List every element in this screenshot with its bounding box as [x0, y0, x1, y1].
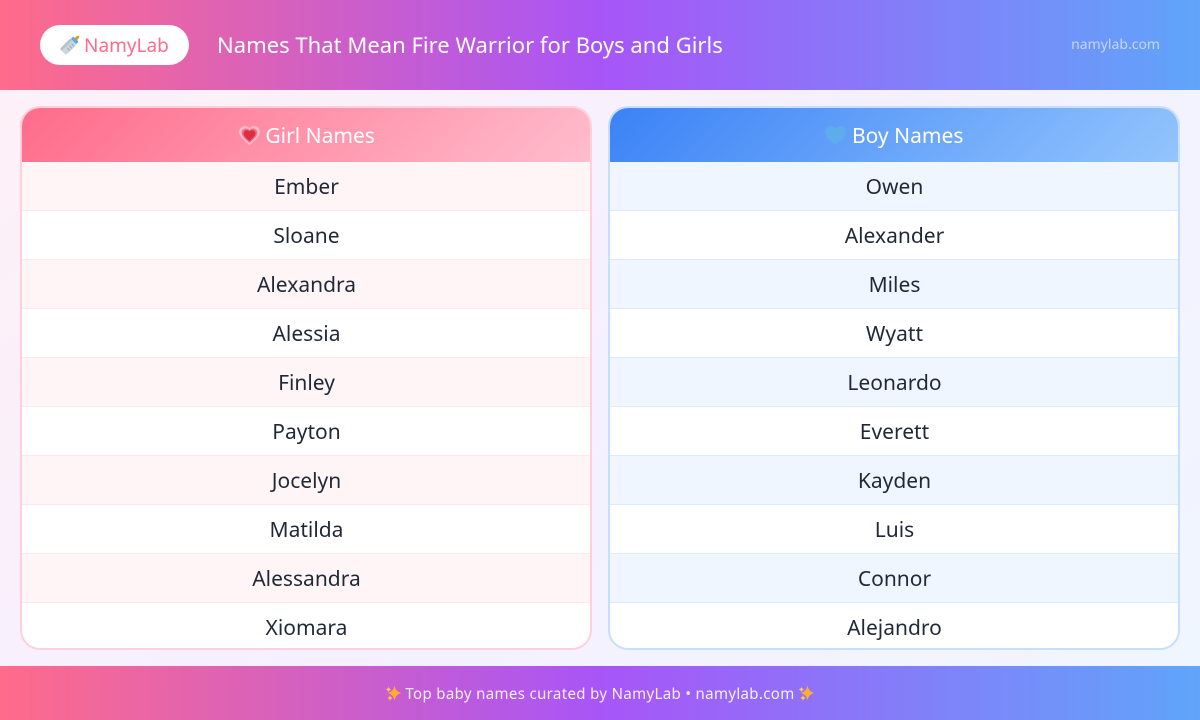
boy name list: Alexander	[845, 222, 944, 250]
boy name list: Miles	[869, 271, 920, 299]
footer text: Top baby names curated by NamyLab • namylab.com	[405, 684, 795, 704]
boy name list: Everett	[860, 418, 929, 446]
footer bar	[0, 666, 1200, 720]
panel: girl names	[20, 106, 592, 650]
girl name list: Payton	[272, 418, 341, 446]
boy name list: Kayden	[858, 467, 931, 495]
boy name list: Luis	[875, 516, 914, 544]
icon: blue heart	[825, 126, 846, 145]
girl name list: Jocelyn	[272, 467, 341, 495]
boy name list: Wyatt	[866, 320, 923, 348]
header bar	[0, 0, 1200, 90]
boy name list: Leonardo	[847, 369, 942, 397]
boy name list: Alejandro	[847, 614, 942, 642]
girl names heading	[22, 108, 590, 162]
girl name list: Alessia	[272, 320, 340, 348]
boy name list: Owen	[866, 173, 923, 201]
panel: boy names	[608, 106, 1180, 650]
site url: namylab.com	[1071, 35, 1160, 54]
icon: baby bottle	[60, 36, 80, 54]
heading text: Boy Names	[852, 122, 963, 150]
girl name list: Ember	[274, 173, 339, 201]
icon: sparkles	[386, 686, 814, 701]
girl name list: Sloane	[273, 222, 340, 250]
heading text: Girl Names	[265, 122, 375, 150]
icon: pink heart	[239, 126, 260, 145]
boy name list: Connor	[858, 565, 931, 593]
logo wordmark: NamyLab	[84, 32, 169, 58]
logo pill	[40, 25, 189, 65]
girl name list: Alessandra	[252, 565, 361, 593]
title: Names That Mean Fire Warrior for Boys and Girls	[217, 30, 723, 60]
girl name list: Matilda	[270, 516, 343, 544]
girl name list: Finley	[278, 369, 335, 397]
girl name list	[22, 162, 590, 642]
boy names heading	[610, 108, 1178, 162]
boy name list	[610, 162, 1178, 642]
girl name list: Alexandra	[257, 271, 356, 299]
girl name list: Xiomara	[266, 614, 347, 642]
